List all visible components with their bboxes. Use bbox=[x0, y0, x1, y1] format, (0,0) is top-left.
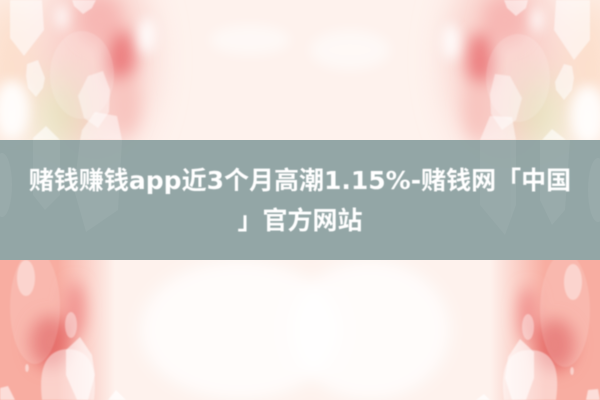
top bokeh hexagons bbox=[10, 0, 590, 140]
title text bbox=[29, 166, 571, 235]
title text: 赌钱赚钱app近3个月高潮1.15%-赌钱网「中国 bbox=[29, 166, 571, 195]
title band bbox=[0, 140, 600, 260]
bottom soft colour washes bbox=[0, 260, 600, 400]
title text: 」官方网站 bbox=[237, 206, 362, 235]
top soft colour washes bbox=[0, 0, 600, 160]
bottom bokeh circles bbox=[0, 250, 600, 400]
faint band hexagons bbox=[0, 140, 600, 235]
